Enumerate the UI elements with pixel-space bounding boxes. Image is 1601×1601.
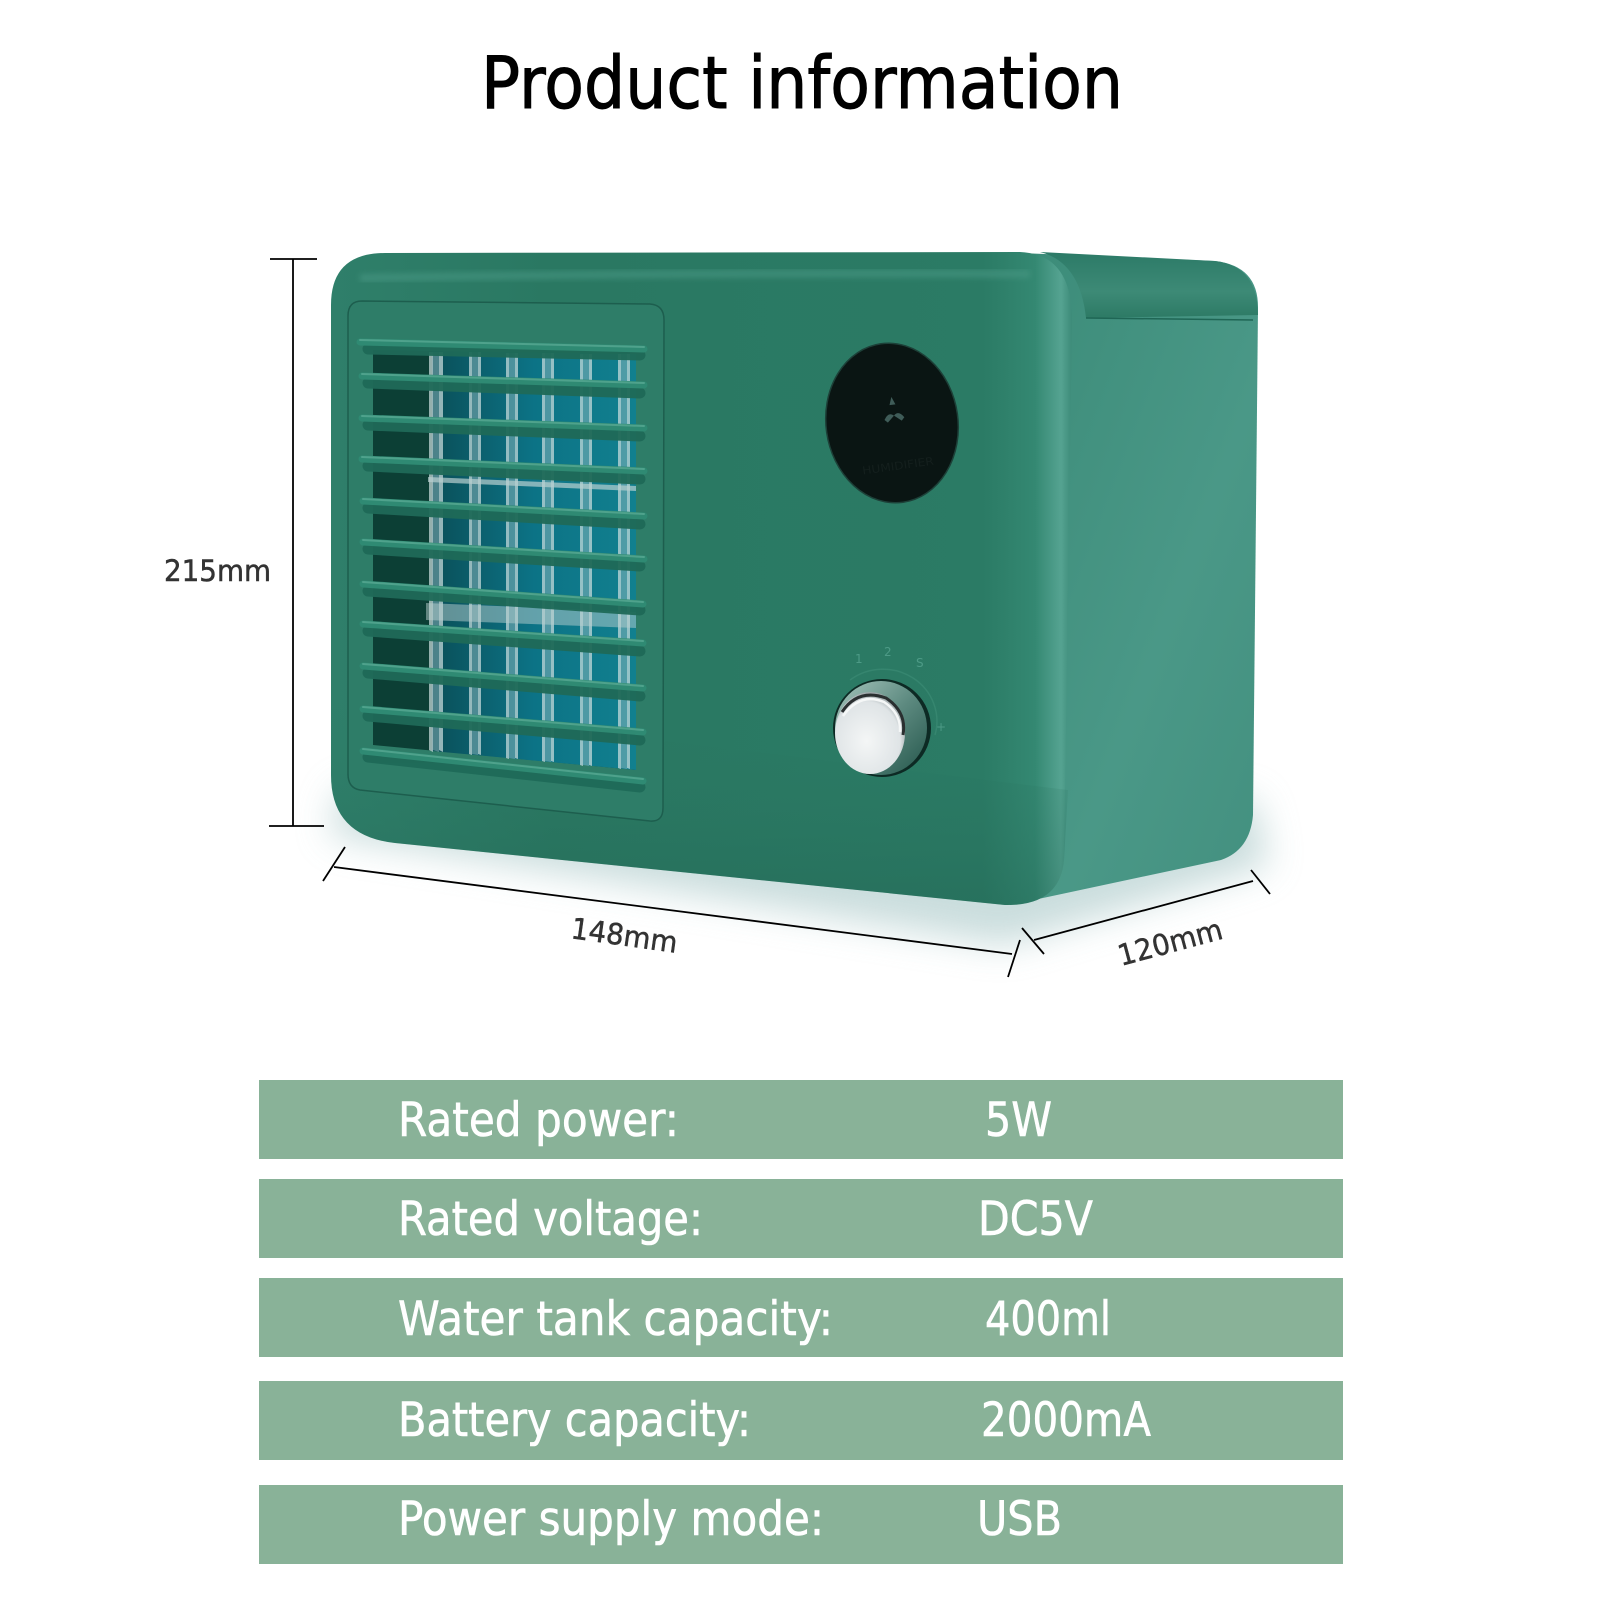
row: rated power	[259, 1080, 1343, 1159]
cooler side face	[1010, 253, 1258, 905]
fan mark	[881, 395, 905, 423]
dimension: height 215mm: 215mm	[164, 554, 271, 588]
row: rated power: Rated power:	[398, 1093, 679, 1148]
grille window	[373, 350, 636, 770]
row: power supply mode: USB	[977, 1492, 1062, 1547]
dimension: width 148mm: 148mm	[569, 911, 680, 960]
title: Product information	[481, 41, 1123, 125]
row: rated power: 5W	[985, 1093, 1052, 1148]
row: water tank capacity: 400ml	[985, 1292, 1111, 1347]
front bottom shading	[331, 700, 1068, 905]
spec table	[259, 1080, 1343, 1564]
device label: HUMIDIFIER	[861, 455, 935, 478]
speed dial markings: 2	[884, 645, 892, 659]
row: power supply mode: Power supply mode:	[398, 1492, 824, 1547]
grille panel	[348, 301, 664, 821]
speed dial markings: S	[916, 656, 924, 670]
row: rated voltage: Rated voltage:	[398, 1192, 703, 1247]
row: rated voltage: DC5V	[978, 1192, 1093, 1247]
row: power supply mode	[259, 1485, 1343, 1564]
cooler lid	[1040, 252, 1258, 318]
row: rated voltage	[259, 1179, 1343, 1258]
speed dial markings: +	[936, 720, 946, 734]
speed dial markings: 1	[855, 652, 863, 666]
dimension: depth 120mm: 120mm	[1114, 912, 1226, 973]
speed dial markings	[855, 645, 946, 734]
louvers	[360, 340, 644, 787]
display: black circle	[816, 335, 968, 511]
floor shadow	[330, 790, 1268, 945]
comb strips	[428, 477, 636, 491]
cooler front face	[331, 252, 1072, 905]
blue filter pad	[432, 351, 636, 770]
dimension: width 148mm	[323, 847, 1020, 977]
row: battery capacity	[259, 1381, 1343, 1460]
row: water tank capacity: Water tank capacity:	[398, 1292, 833, 1347]
knob	[833, 669, 937, 777]
dimension: depth 120mm	[1022, 870, 1270, 973]
row: battery capacity: Battery capacity:	[398, 1393, 751, 1448]
row: water tank capacity	[259, 1278, 1343, 1357]
front top highlight	[360, 274, 1030, 278]
row: battery capacity: 2000mA	[981, 1393, 1151, 1448]
translucent ribs	[429, 352, 630, 769]
product: green air cooler	[330, 252, 1268, 945]
